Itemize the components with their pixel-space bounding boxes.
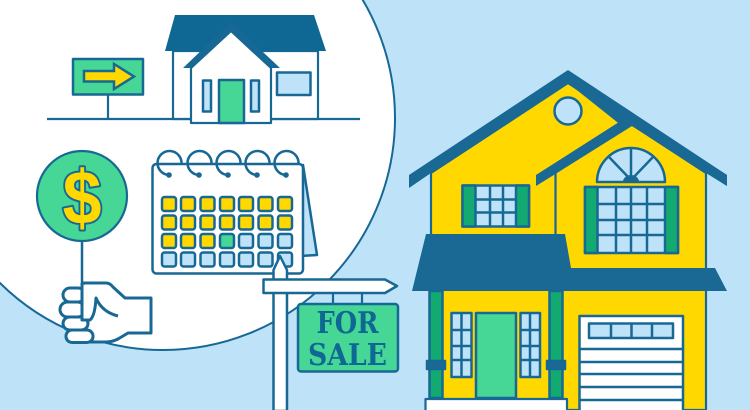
calendar binder rings (158, 151, 299, 178)
for sale text: SALE (308, 338, 387, 373)
calendar page (152, 164, 303, 274)
small house side windows (203, 80, 259, 112)
front door (476, 313, 516, 398)
ground line (47, 118, 360, 120)
calendar day cells (162, 197, 292, 266)
small house right window (277, 72, 310, 95)
small house main roof (165, 15, 326, 51)
wall divider (554, 173, 557, 236)
icon: dollar sign on a stick: $ (63, 156, 101, 241)
house walls (431, 83, 706, 410)
white circle panel (0, 0, 395, 350)
small house body (173, 51, 318, 119)
upper left window (462, 186, 529, 226)
sign hangers (333, 293, 362, 304)
small house door (219, 80, 244, 123)
door side windows (452, 313, 540, 377)
signpost pole (274, 256, 287, 410)
main roof (409, 70, 727, 188)
for sale sign board (298, 304, 398, 372)
icon: direction sign (73, 59, 143, 119)
arched fan window (597, 148, 665, 182)
large yellow house (409, 70, 727, 410)
for sale text: FOR (316, 306, 379, 341)
for sale signpost (264, 256, 398, 410)
for sale text (308, 306, 387, 373)
porch step (426, 399, 567, 410)
icon: calendar (152, 151, 317, 274)
round attic window (554, 98, 582, 124)
front gable roof (536, 115, 727, 186)
icon: hand holding stick (60, 283, 151, 342)
small house scene (47, 15, 360, 123)
upper right window (585, 187, 678, 253)
small house front gable (183, 22, 280, 123)
icon: dollar sign on a stick (37, 151, 127, 322)
porch columns (427, 291, 565, 398)
garage door (580, 316, 683, 410)
signpost arm (264, 280, 397, 293)
calendar back page (300, 165, 317, 256)
porch and garage roof (412, 234, 727, 291)
